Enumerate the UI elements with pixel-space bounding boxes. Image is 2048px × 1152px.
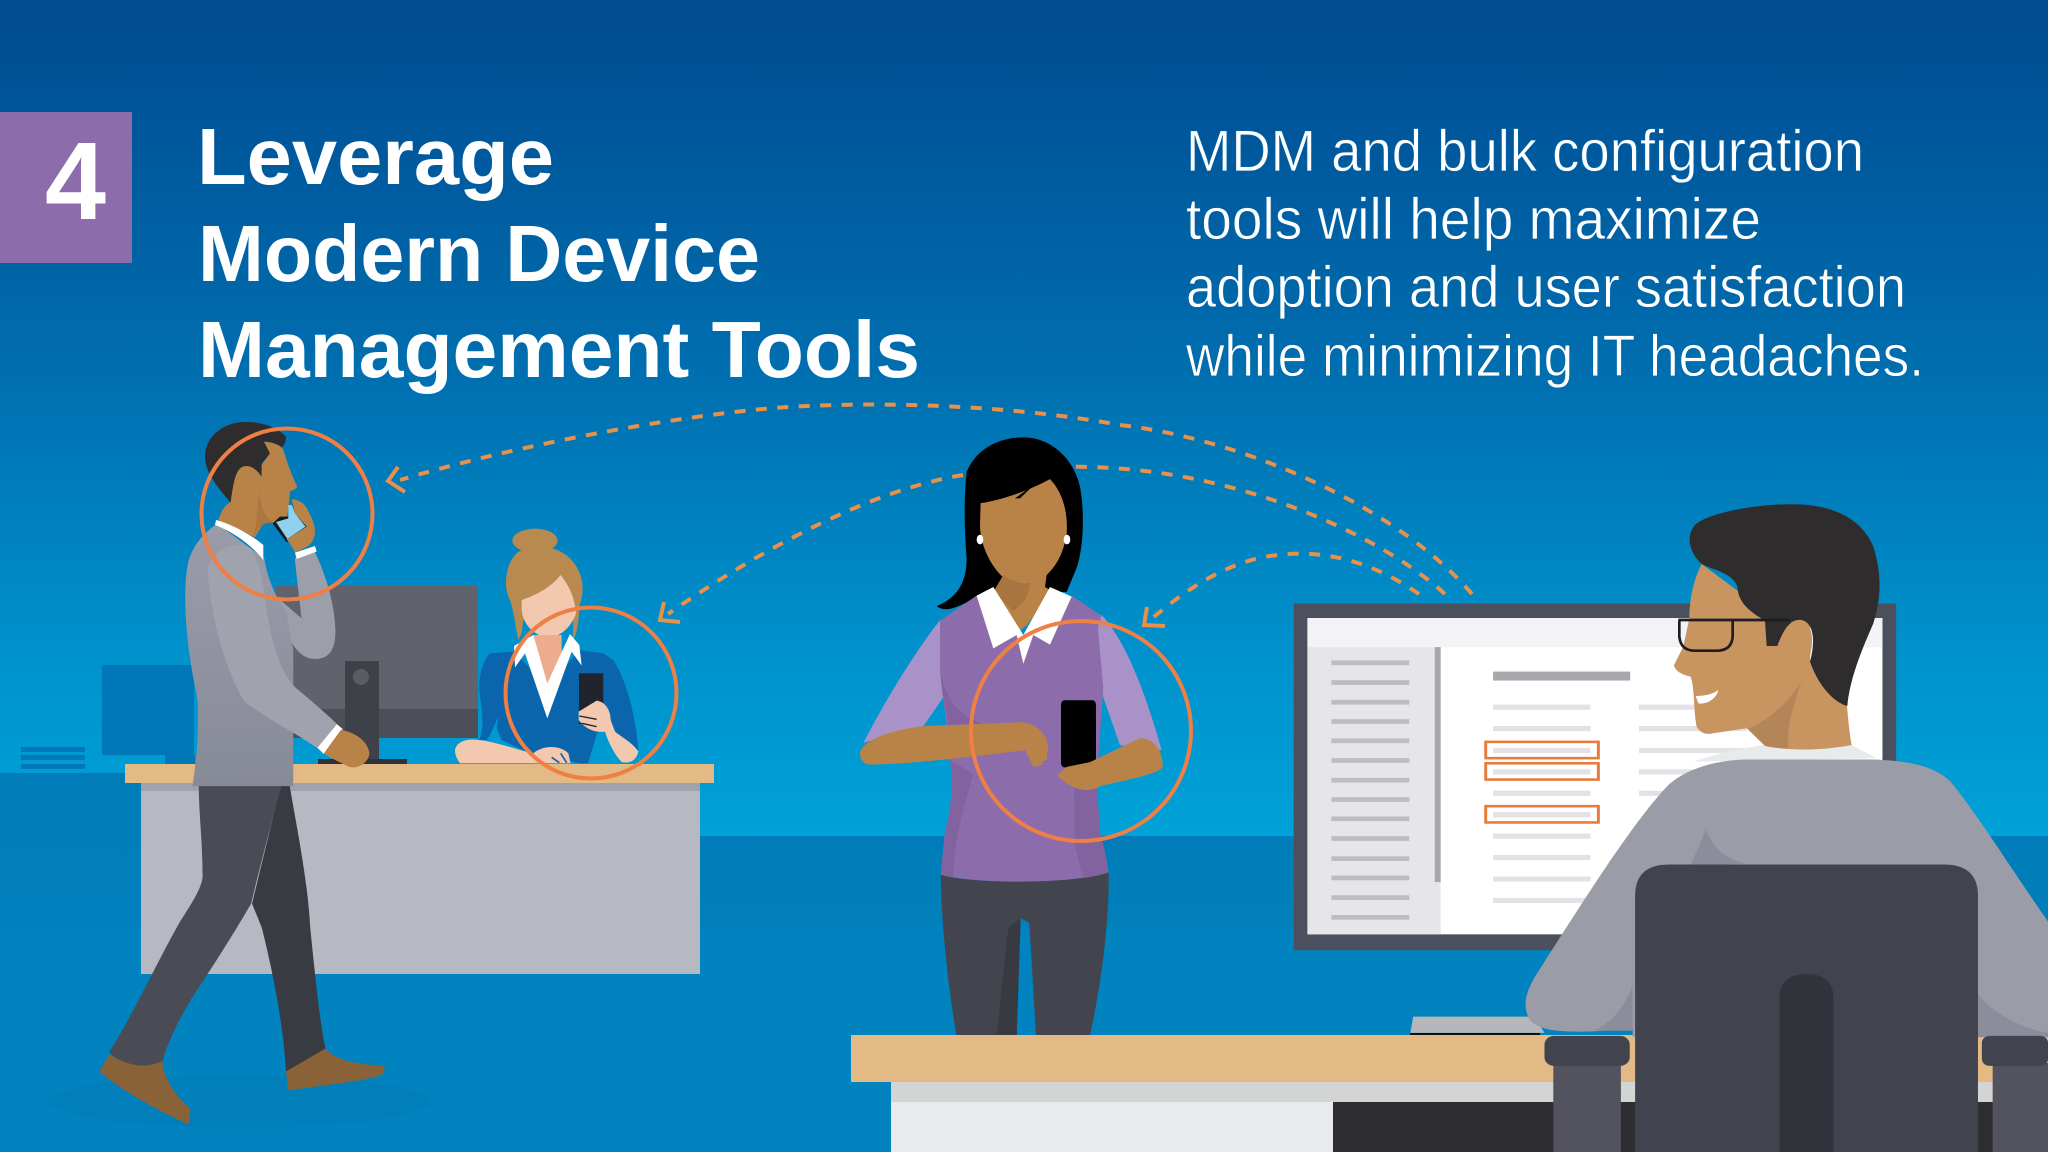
title: Management Tools: [198, 305, 920, 394]
description text: [1185, 119, 1924, 389]
neck: [533, 635, 562, 683]
chair back: [1635, 864, 1978, 1152]
trousers: [941, 872, 1109, 1035]
walking man: [48, 524, 431, 1128]
raised sleeve: [276, 553, 335, 659]
title: [197, 112, 920, 394]
receptionist hair: [506, 546, 583, 640]
description text: tools will help maximize: [1186, 187, 1761, 252]
document content: [1493, 672, 1747, 903]
left desk monitor: [276, 586, 478, 764]
phone: [579, 673, 603, 724]
arc: to walking man: [388, 405, 1472, 594]
man head: [218, 442, 297, 537]
receptionist face: [522, 575, 576, 637]
collar: [215, 520, 263, 560]
phone: [1061, 700, 1096, 767]
chair spine: [1780, 974, 1833, 1152]
jacket: [185, 524, 293, 786]
left desk: [125, 764, 714, 974]
neck shadow: [1748, 680, 1802, 748]
highlight circles: [202, 428, 1191, 841]
right desk: [851, 1033, 2048, 1152]
sweater shading: [1593, 829, 2048, 1037]
left arm: [860, 722, 1048, 767]
man head and phone: [205, 422, 317, 560]
right sleeve: [1098, 615, 1162, 750]
glasses: [1678, 620, 1790, 651]
hair bun: [512, 529, 558, 553]
inner leg shade: [997, 918, 1021, 1035]
keyboard fingers: [552, 753, 567, 763]
left sleeve: [863, 620, 943, 743]
monitor frame: [1294, 603, 1896, 950]
blouse collar: [514, 634, 582, 718]
smile: [1696, 690, 1718, 704]
number badge: [0, 112, 132, 263]
woman face and neck: [980, 479, 1067, 630]
earrings: [977, 535, 1070, 544]
phone body: [273, 517, 308, 542]
chair arm pads: [1544, 1036, 2048, 1066]
desktop monitor: [1294, 603, 1896, 1033]
keyboard: [1410, 1017, 1544, 1033]
man hair: [205, 422, 286, 503]
phone screen: [276, 505, 306, 539]
rear leg: [252, 784, 326, 1071]
sweater: [1526, 759, 2048, 1037]
blouse: [479, 650, 638, 763]
vest shading: [940, 669, 1108, 880]
vest: [940, 596, 1108, 882]
hand with phone: [579, 701, 638, 762]
collar: [977, 587, 1072, 664]
screen top bar: [1307, 618, 1882, 647]
seated man skin: [1674, 564, 1852, 750]
screen: [1307, 618, 1882, 934]
description text: adoption and user satisfaction: [1186, 255, 1906, 320]
seated man hair: [1690, 504, 1880, 706]
cuff: [295, 546, 317, 559]
hand on phone: [287, 499, 315, 553]
seated man head: [1674, 504, 1880, 762]
sidebar: [1307, 647, 1441, 934]
floor shadow: [48, 1075, 431, 1128]
description text: MDM and bulk configuration: [1186, 119, 1864, 184]
finger gaps: [579, 716, 597, 727]
seated man body and chair: [1526, 759, 2048, 1152]
jacket front arm: [208, 545, 342, 750]
resting arm: [455, 740, 571, 763]
arc: to receptionist: [660, 466, 1445, 622]
background office silhouettes: [21, 665, 195, 773]
title: Leverage: [197, 112, 554, 201]
neck shadow: [993, 575, 1030, 611]
title: Modern Device: [198, 209, 760, 298]
walking man hand: [324, 730, 369, 767]
shoes: [99, 1048, 384, 1124]
description text: while minimizing IT headaches.: [1185, 324, 1924, 389]
shirt cuff: [317, 724, 343, 754]
center woman: [860, 437, 1163, 1035]
arc: to center woman: [1144, 554, 1419, 626]
number badge: 4: [45, 120, 106, 243]
chair arm posts: [1553, 1063, 2048, 1152]
jaw shading: [254, 490, 273, 537]
woman hair: [937, 437, 1083, 609]
receptionist: [455, 529, 638, 763]
hair strand: [1015, 484, 1035, 498]
ear: [1778, 620, 1812, 662]
highlighted rows: [1486, 742, 1598, 822]
right hand: [1058, 738, 1163, 790]
front leg: [109, 784, 282, 1066]
white shirt collar: [1693, 745, 1877, 762]
